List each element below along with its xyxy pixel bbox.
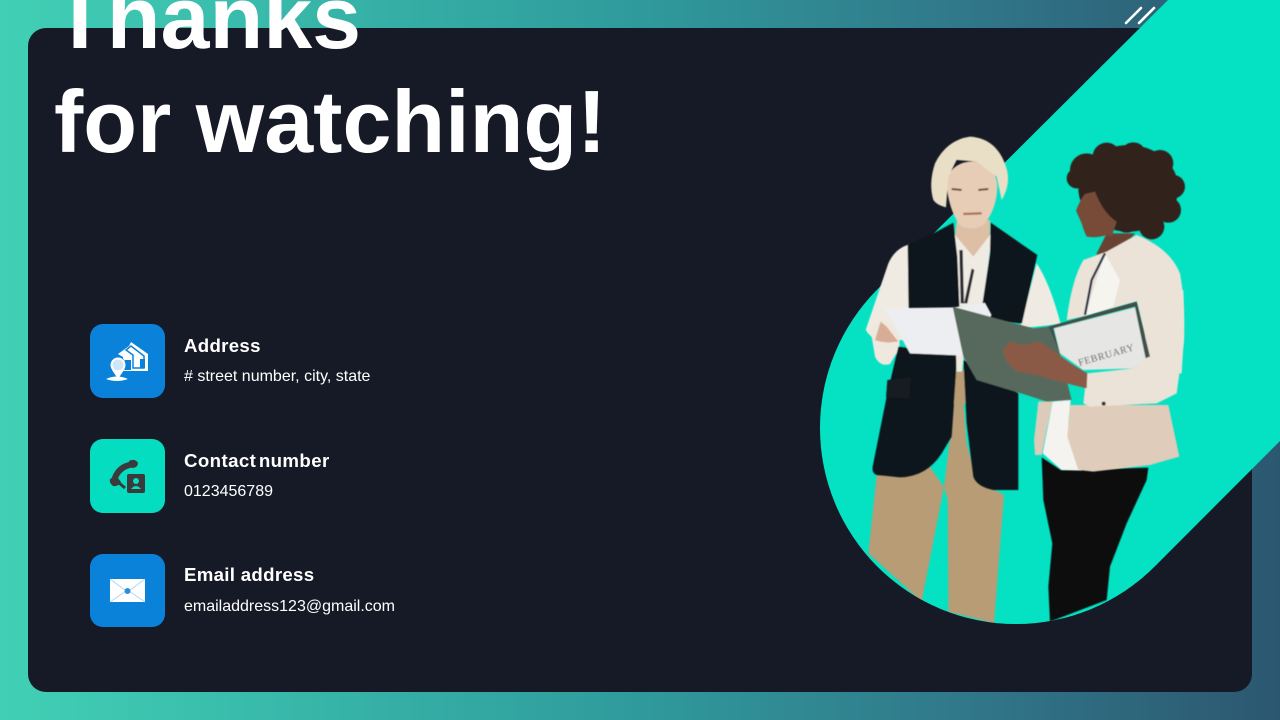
woman one: hair — [931, 137, 1008, 207]
text block: contact number — [184, 450, 330, 500]
lower bodies of the two people — [868, 400, 1148, 623]
woman two: neck — [1097, 233, 1135, 280]
teal rounded diagonal shape — [820, 0, 1280, 624]
woman two: face — [1076, 192, 1117, 237]
woman one: neck and face — [955, 217, 990, 257]
woman one: waistcoat — [908, 223, 1037, 323]
hand of woman one — [875, 322, 898, 343]
woman two: blazer shoulders — [1067, 235, 1184, 373]
white shirt hem — [1043, 400, 1082, 471]
shirt strip — [956, 353, 964, 372]
waistcoat lower right — [963, 360, 1018, 490]
trouser waist — [952, 370, 967, 403]
blazer lower left strip — [1034, 402, 1053, 455]
email value: emailaddress123@gmail.com — [184, 598, 395, 615]
icon: address — [90, 324, 165, 398]
green folder — [953, 307, 1072, 402]
pocket flap — [886, 377, 911, 398]
torsos, papers and folder — [867, 290, 1184, 490]
contact value: 0123456789 — [184, 483, 273, 500]
blazer sleeve — [1083, 290, 1184, 407]
text block: address — [184, 335, 370, 385]
folder page with label — [1054, 307, 1146, 370]
email heading: Email address — [184, 564, 314, 585]
icon: phone — [90, 439, 165, 513]
address value: # street number, city, state — [184, 368, 370, 385]
title — [53, 0, 606, 171]
blazer skirt — [1067, 405, 1179, 472]
waistcoat lower left — [872, 347, 957, 477]
woman two: curly hair — [1067, 142, 1185, 239]
address heading: Address — [184, 335, 261, 356]
illustration: teal shape and two colleagues — [820, 0, 1280, 624]
title line two: for watching! — [54, 72, 606, 171]
icon: envelope — [90, 554, 165, 627]
contact heading: Contact number — [184, 450, 330, 471]
hand of woman two — [1003, 342, 1087, 388]
woman one: blouse — [866, 235, 1061, 340]
heads and shoulders of the two people — [866, 137, 1185, 373]
left forearm — [867, 320, 900, 365]
papers held by woman one — [885, 303, 992, 356]
text block: email — [184, 564, 395, 615]
decorative double slash — [1126, 8, 1154, 23]
folder label text: FEBRUARY — [1077, 342, 1136, 369]
